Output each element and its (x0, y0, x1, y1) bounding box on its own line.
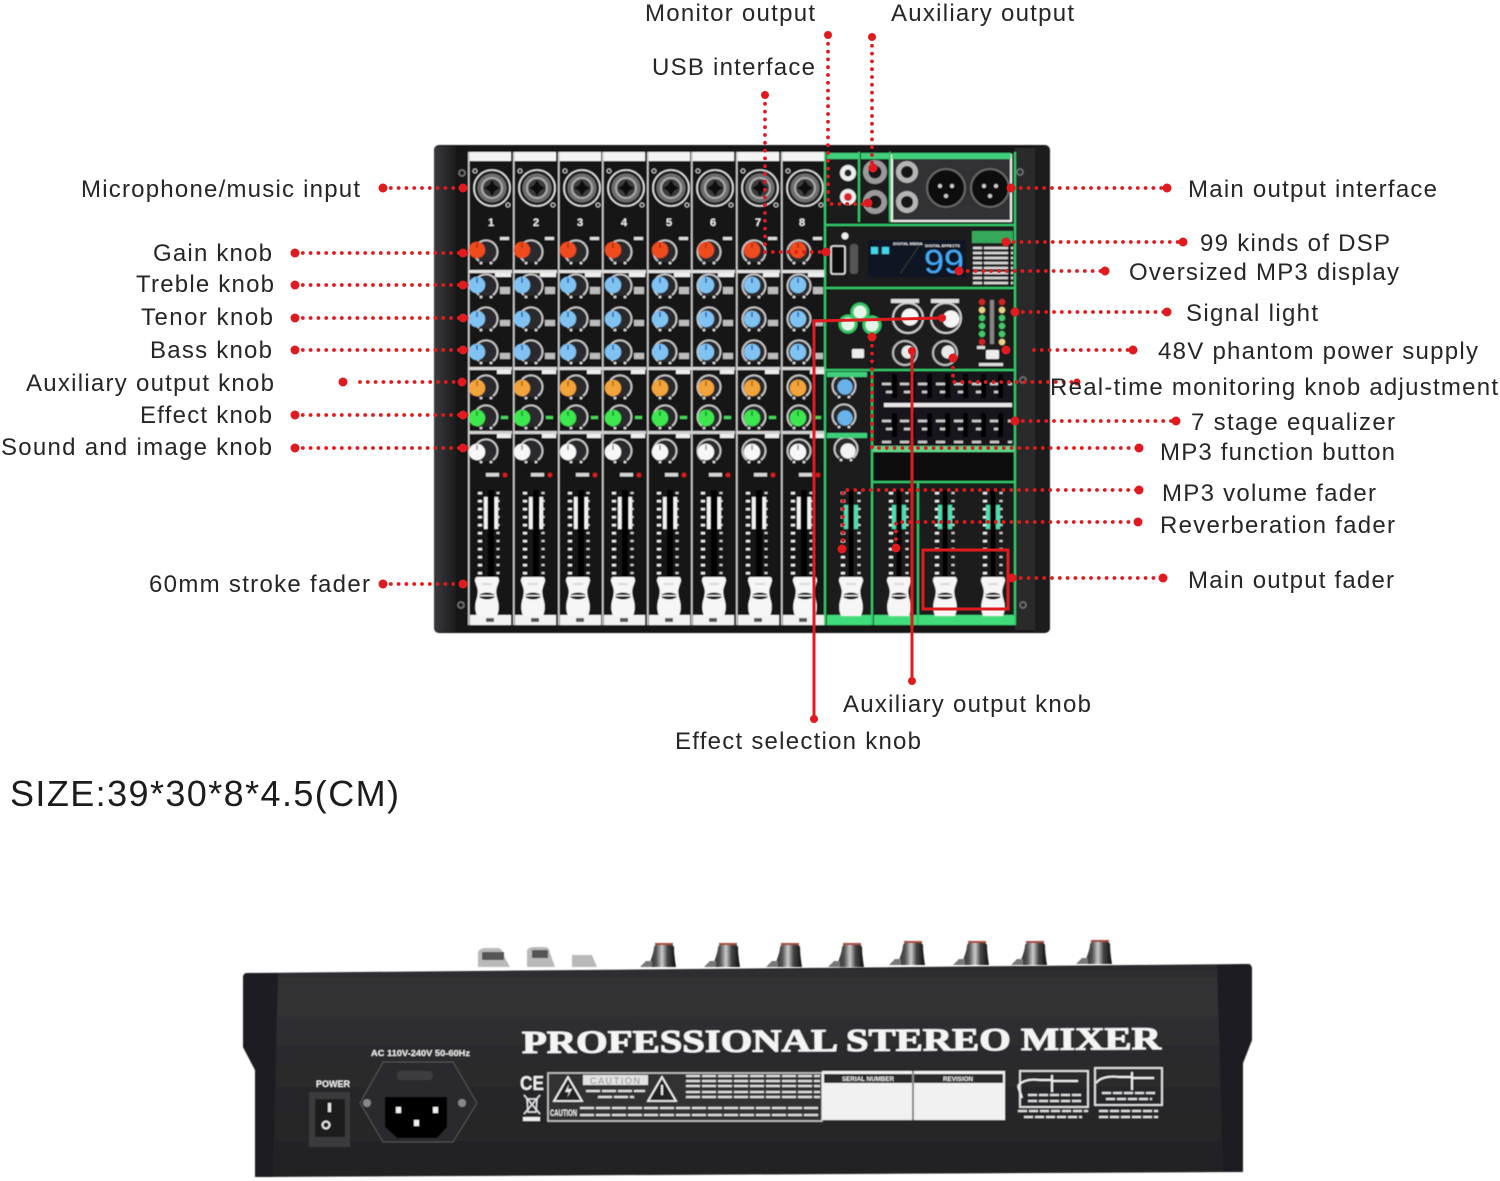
red highlight box: main output faders (923, 550, 1008, 609)
callout: mp3 volume fader: MP3 volume fader (1162, 480, 1376, 507)
right end cap (1217, 964, 1252, 1172)
input channel strips (468, 152, 825, 625)
signal leds (979, 299, 1005, 345)
photo: mixer rear panel (243, 940, 1252, 1177)
callout: auxiliary output: Auxiliary output (891, 0, 1074, 27)
callout: 7 stage equalizer: 7 stage equalizer (1191, 409, 1395, 436)
callout: reverberation fader (892, 512, 1395, 552)
power switch (309, 1079, 350, 1147)
callout: 60mm stroke fader: 60mm stroke fader (149, 571, 370, 598)
left auxiliary knobs (827, 372, 867, 461)
mp3 display: DIGITAL EFFECTS (925, 243, 960, 248)
callout: bass knob: Bass knob (150, 337, 272, 364)
black blank panel (874, 452, 1013, 482)
callout: bass knob (150, 337, 470, 364)
seven stage equalizer (876, 372, 1013, 445)
callout: sound and image knob: Sound and image knob (1, 434, 272, 461)
callout: 99 kinds of dsp: 99 kinds of DSP (1200, 230, 1390, 257)
power switch: POWER (316, 1079, 350, 1089)
callout: treble knob (136, 271, 470, 298)
channel fader caps (475, 577, 817, 616)
caution label: CAUTION (590, 1076, 640, 1086)
callout: gain knob (153, 240, 472, 267)
callout: oversized mp3 display: Oversized MP3 display (1129, 259, 1399, 286)
right labels and leaders (838, 176, 1498, 594)
product title: PROFESSIONAL STEREO MIXER (522, 1020, 1162, 1060)
callout: tenor knob: Tenor knob (141, 304, 273, 331)
callout: sound and image knob (1, 434, 468, 461)
usb port (831, 232, 858, 274)
left side cap (434, 146, 456, 632)
callout: main output interface: Main output interface (1188, 176, 1437, 203)
callout: mp3 function button (868, 332, 1395, 466)
serial number and revision box: SERIAL NUMBER (842, 1077, 895, 1083)
solid leader: effect selection knob (810, 314, 946, 723)
callout: usb interface: USB interface (652, 54, 815, 81)
callout: 48v phantom power: 48V phantom power supply (1158, 338, 1478, 365)
left labels and leaders (1, 176, 472, 598)
iec power socket (360, 1048, 477, 1142)
channel numbers: 3 (577, 217, 583, 229)
callout: auxiliary output (868, 0, 1074, 172)
master section (825, 152, 1015, 625)
solid leader: auxiliary output knob (908, 347, 916, 685)
callout: mp3 volume fader (838, 480, 1376, 554)
callout: monitor output: Monitor output (645, 0, 815, 27)
green section outlines (825, 152, 1015, 625)
channel numbers: 6 (710, 217, 716, 229)
left end cap (243, 973, 278, 1177)
callout: auxiliary output knob: Auxiliary output knob (26, 370, 274, 397)
iec power socket: AC 110V-240V 50-60Hz (371, 1048, 470, 1058)
mp3 display (868, 240, 966, 280)
rca and monitor jacks (827, 153, 889, 214)
callout: gain knob: Gain knob (153, 240, 272, 267)
dsp effect list (972, 231, 1013, 283)
mp3 display: 99 (924, 243, 964, 280)
callout: auxiliary output knob (26, 370, 468, 397)
channel numbers: 1 (488, 217, 494, 229)
rear body (243, 964, 1252, 1177)
callout: microphone input: Microphone/music input (81, 176, 360, 203)
callout: effect knob: Effect knob (140, 402, 272, 429)
rear jacks and knobs (478, 940, 1112, 967)
photo: mixer top view (434, 145, 1050, 633)
callout: 7 stage equalizer (1010, 409, 1395, 436)
callout: mp3 function button: MP3 function button (1160, 439, 1395, 466)
channel numbers: 8 (799, 217, 805, 229)
callout: main output fader (1008, 567, 1394, 594)
master fader caps (839, 577, 1005, 616)
main output xlr (892, 153, 1011, 221)
right side cap (1034, 146, 1050, 632)
callout: real-time monitoring: Real-time monitoring knob adjustment (1050, 374, 1498, 401)
callout: treble knob: Treble knob (136, 271, 274, 298)
label: auxiliary output knob: Auxiliary output knob (843, 691, 1091, 718)
callout: effect knob (140, 402, 470, 429)
certification marks (520, 1073, 544, 1121)
callout: signal light (1010, 300, 1318, 327)
callout: real-time monitoring (948, 354, 1498, 401)
channel knobs (469, 242, 806, 460)
channel numbers: 2 (533, 217, 539, 229)
master fader tracks (843, 490, 1001, 580)
chassis (434, 145, 1050, 633)
callout: monitor output (645, 0, 872, 208)
callout: reverberation fader: Reverberation fader (1160, 512, 1395, 539)
screws (458, 169, 1026, 608)
connection diagrams (1018, 1068, 1162, 1117)
effect and monitor knobs (891, 299, 961, 365)
channel numbers (488, 217, 805, 229)
label: effect selection knob: Effect selection knob (675, 728, 921, 755)
callout: 99 kinds of dsp (1002, 230, 1390, 257)
caution label: CAUTION (550, 1108, 577, 1118)
callout: tenor knob (141, 304, 470, 331)
channel numbers: 4 (621, 217, 628, 229)
trefoil effect buttons (840, 304, 880, 333)
callout: usb interface (652, 54, 830, 256)
size text: SIZE:39*30*8*4.5(CM) (10, 773, 399, 814)
callout: signal light: Signal light (1186, 300, 1318, 327)
channel numbers: 5 (666, 217, 672, 229)
certification marks: CE (520, 1073, 544, 1095)
green bottom labels (827, 615, 1014, 625)
caution label (548, 1073, 822, 1121)
channel numbers: 7 (755, 217, 761, 229)
callout: main output fader: Main output fader (1188, 567, 1394, 594)
callout: 48v phantom power (1002, 338, 1478, 365)
serial number and revision box (822, 1071, 1005, 1120)
callout: oversized mp3 display (954, 259, 1399, 286)
callout: main output interface (1006, 176, 1437, 203)
serial number and revision box: REVISION (943, 1077, 973, 1083)
top labels and leaders (645, 0, 1074, 256)
mp3 display: DIGITAL MEDIA (893, 241, 923, 246)
callout: 60mm stroke fader (149, 571, 468, 598)
small buttons (852, 346, 1003, 366)
